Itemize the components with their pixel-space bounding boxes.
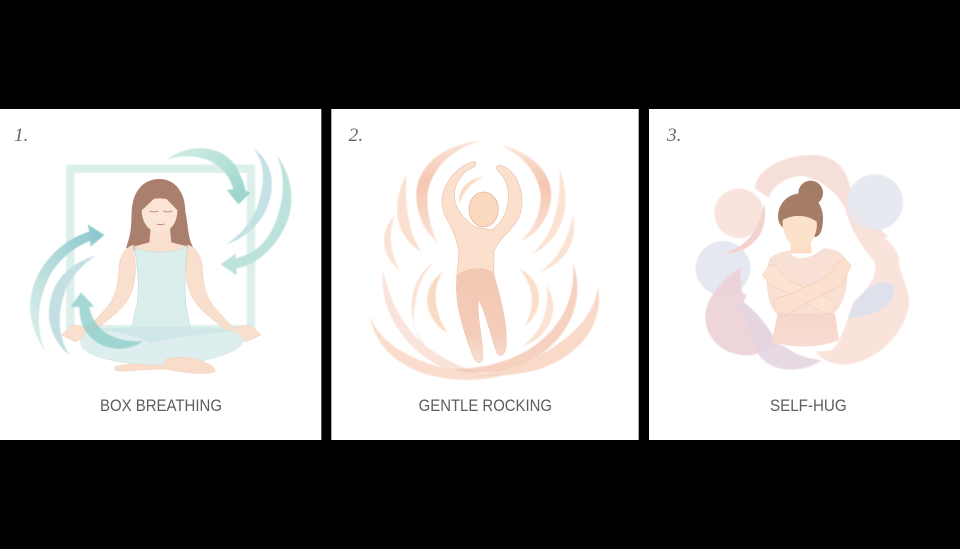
hair bun [798,181,823,205]
leg overlap [95,328,233,343]
neck and chest [134,228,187,255]
motion waves [370,141,599,380]
breathing square [70,169,251,329]
step number 1: 1. [14,125,28,146]
arm under [762,264,835,313]
arms [62,245,261,342]
panel: box breathing [0,109,321,440]
shirt shading [772,313,839,346]
figure: woman hugging herself [762,181,851,346]
shirt and upper arms [767,248,847,346]
arrow: bottom left over legs [71,292,143,349]
tank top [132,245,190,328]
step number 2: 2. [349,125,363,146]
white interior of aura [743,176,876,351]
legs [456,269,506,363]
eyes and mouth [150,211,172,225]
upper body silhouette [442,162,522,278]
hair [126,179,193,250]
figure: meditating woman [62,179,261,374]
face [783,216,817,249]
neck [790,238,812,253]
hair part [141,192,178,210]
legs [81,328,243,369]
label: box breathing: BOX BREATHING [100,396,222,415]
feet [115,357,215,374]
arm over [773,259,851,314]
panel: self-hug [649,109,960,440]
hair [778,193,823,237]
embrace aura [696,155,909,370]
breathing arrows [30,148,291,356]
figure: rocking person [442,162,522,363]
inner pink crescent [724,203,765,253]
panel: gentle rocking [331,109,639,440]
label: self-hug: SELF-HUG [770,396,847,415]
step number 3: 3. [666,125,681,146]
head [469,192,498,227]
label: gentle rocking: GENTLE ROCKING [419,396,552,415]
face [142,198,177,232]
